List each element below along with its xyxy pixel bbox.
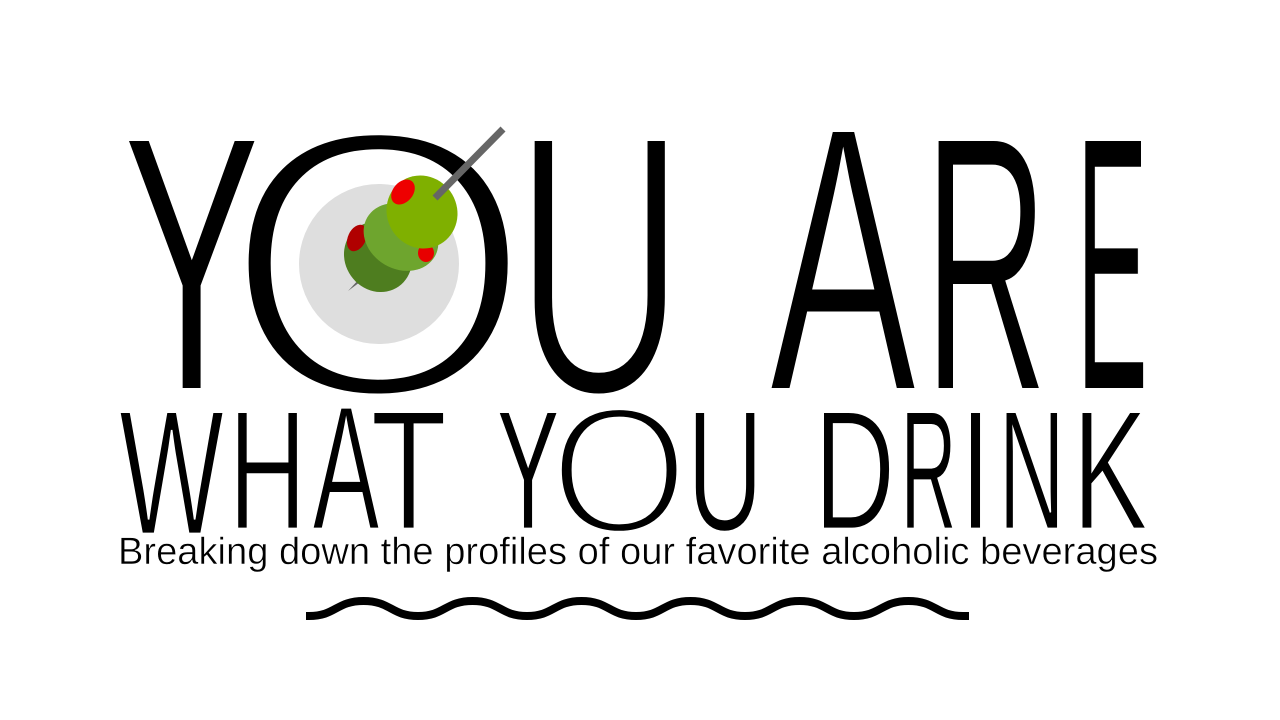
title: YOU ARE: R [924,62,1048,468]
title: YOU ARE: A [769,48,918,473]
title: WHAT YOU DRINK [119,370,1148,572]
wavy divider [306,601,969,616]
title: WHAT YOU DRINK: Y [497,376,559,564]
title: WHAT YOU DRINK: D [814,374,895,565]
title: WHAT YOU DRINK: K [1072,375,1148,565]
subtitle: Breaking down the profiles of our favorite alcoholic beverages [118,531,1158,573]
title: WHAT YOU DRINK: W [119,374,224,572]
title: WHAT YOU DRINK: R [901,375,956,564]
title: WHAT YOU DRINK: H [229,376,306,566]
title: WHAT YOU DRINK: A [312,370,380,567]
title: YOU ARE: Y [124,63,260,466]
title: WHAT YOU DRINK: T [371,375,447,565]
title: WHAT YOU DRINK: I [959,374,992,565]
title: WHAT YOU DRINK: O [550,371,689,572]
title: WHAT YOU DRINK: N [998,376,1065,566]
title: YOU ARE: O [221,47,535,480]
title: YOU ARE: E [1076,61,1148,466]
icon: olives on a toothpick [299,129,503,344]
title: YOU ARE [124,47,1148,480]
title: YOU ARE: U [514,57,686,474]
title: WHAT YOU DRINK: U [687,375,763,568]
